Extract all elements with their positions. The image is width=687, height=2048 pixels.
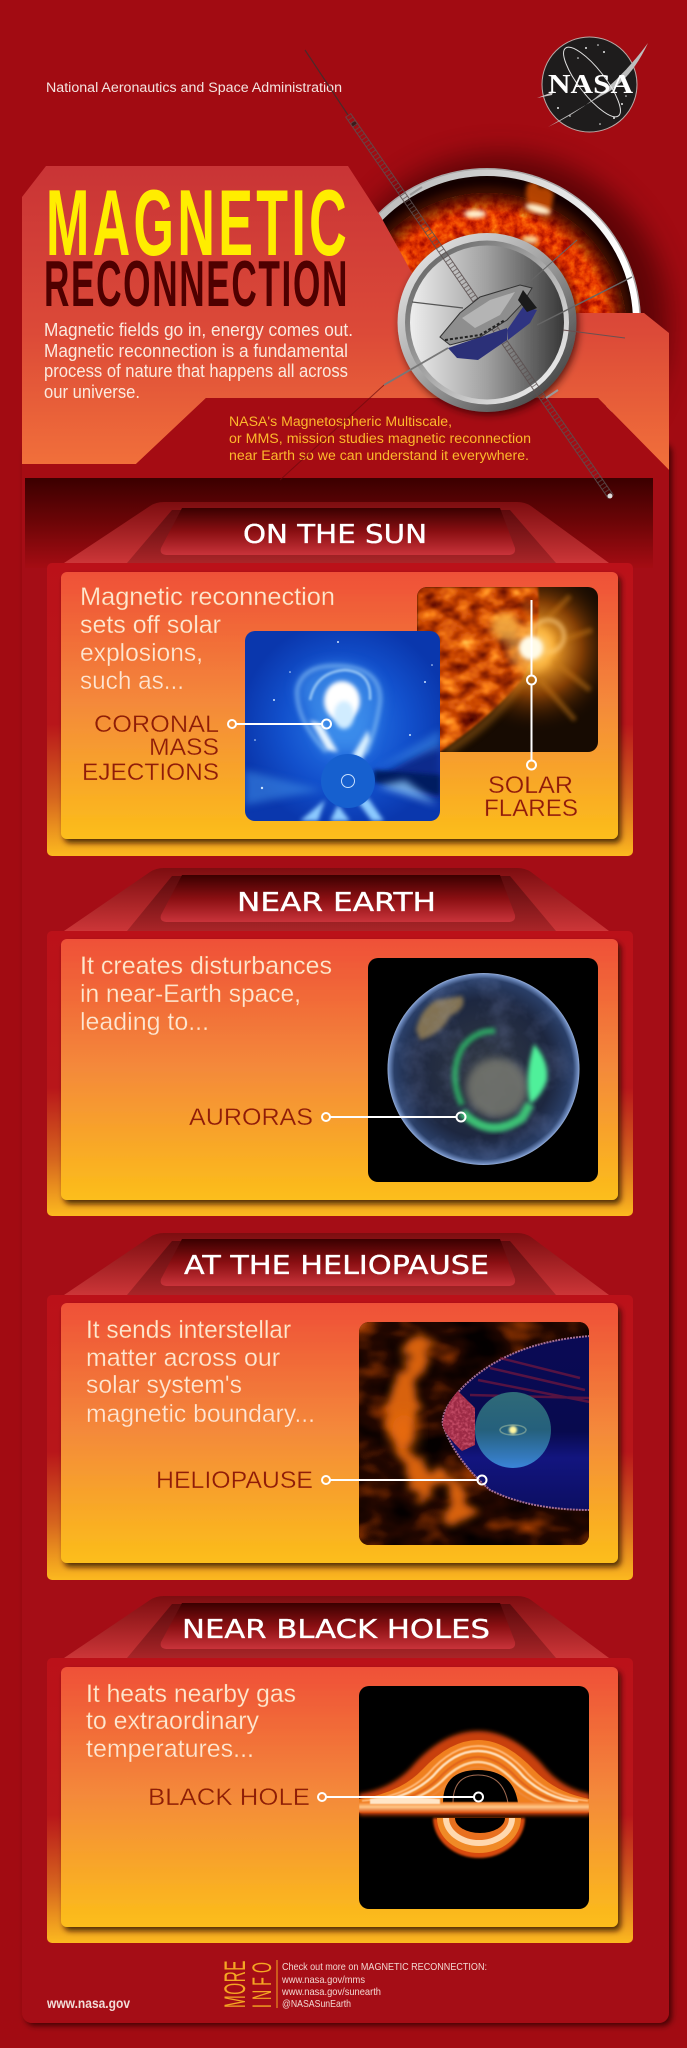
callout: auroras <box>189 1104 466 1131</box>
card: at the heliopause <box>47 1295 633 1580</box>
lattice antenna <box>305 50 614 499</box>
spacecraft disc <box>398 233 576 412</box>
image: heliopause <box>359 1322 590 1545</box>
tab: near earth: NEAR EARTH <box>237 888 436 918</box>
callout: coronal mass ejections <box>82 711 331 786</box>
image: earth with aurora <box>368 958 598 1182</box>
card: near earth <box>47 931 633 1216</box>
footer: links <box>281 1961 487 2010</box>
spacecraft booms <box>280 240 632 480</box>
illustration: sun in ring <box>378 168 641 412</box>
text: near black holes <box>86 1680 296 1763</box>
callout: heliopause <box>156 1467 486 1494</box>
callout: solar flares: SOLAR <box>488 772 573 799</box>
tab: near earth <box>64 868 609 931</box>
text: at the heliopause: matter across our <box>86 1344 280 1372</box>
callout: solar flares: FLARES <box>484 795 578 822</box>
intro text: Magnetic fields go in, energy comes out. <box>44 319 353 340</box>
main content panel <box>22 440 669 2023</box>
agency name: National Aeronautics and Space Administration <box>46 80 342 95</box>
footer: links: Check out more on MAGNETIC RECONNECTION: <box>282 1961 487 1973</box>
footer: links: www.nasa.gov/mms <box>281 1974 365 1986</box>
image: coronal mass ejection <box>245 631 440 821</box>
card: on the sun <box>47 563 633 856</box>
intro text: Magnetic reconnection is a fundamental <box>44 340 348 361</box>
footer: links: @NASASunEarth <box>282 1998 351 2010</box>
text: near earth: leading to... <box>80 1008 209 1036</box>
callout: solar flares <box>484 600 578 822</box>
text: on the sun: explosions, <box>80 639 203 667</box>
intro text: our universe. <box>44 381 140 402</box>
text: on the sun: Magnetic reconnection <box>80 583 335 611</box>
tab: near black holes: NEAR BLACK HOLES <box>182 1615 490 1645</box>
section: near earth <box>47 868 633 1216</box>
callout: auroras: AURORAS <box>189 1104 313 1131</box>
text: on the sun: sets off solar <box>80 611 221 639</box>
tab: near black holes <box>64 1596 609 1658</box>
text: at the heliopause <box>86 1316 315 1428</box>
MMS mission text <box>229 414 531 463</box>
section: at the heliopause <box>47 1233 633 1580</box>
tab: at the heliopause <box>64 1233 609 1295</box>
footer: links: www.nasa.gov/sunearth <box>281 1986 381 1998</box>
callout: black hole: BLACK HOLE <box>148 1784 310 1811</box>
footer: more info label: INFO <box>247 1958 277 2008</box>
text: near earth: It creates disturbances <box>80 952 332 980</box>
text: near black holes: to extraordinary <box>86 1707 259 1735</box>
header panel <box>22 166 669 470</box>
section: near black holes <box>47 1596 633 1943</box>
section: on the sun <box>47 502 633 856</box>
spacecraft <box>440 285 537 360</box>
text: at the heliopause: magnetic boundary... <box>86 1400 315 1428</box>
footer: more info label <box>219 1958 277 2008</box>
text: at the heliopause: solar system's <box>86 1371 242 1399</box>
image: solar flare <box>417 587 598 752</box>
MMS mission text: near Earth so we can understand it everywhere. <box>229 448 529 463</box>
header notch <box>22 398 669 480</box>
intro text: process of nature that happens all across <box>44 360 348 381</box>
dark backdrop at top of sections <box>25 478 653 568</box>
footer: more info divider <box>276 1960 278 2008</box>
text: near earth: in near-Earth space, <box>80 980 301 1008</box>
title: MAGNETIC: MAGNETIC <box>46 170 350 275</box>
icon: NASA logo: NASA <box>548 69 634 99</box>
intro text <box>44 319 353 402</box>
MMS mission text: NASA's Magnetospheric Multiscale, <box>229 414 452 429</box>
text: near earth <box>80 952 332 1036</box>
callout: coronal mass ejections: MASS <box>149 734 219 761</box>
footer: more info label: MORE <box>219 1960 252 2008</box>
callout: black hole <box>148 1784 483 1811</box>
text: at the heliopause: It sends interstellar <box>86 1316 291 1344</box>
MMS mission text: or MMS, mission studies magnetic reconnection <box>229 431 531 446</box>
title: RECONNECTION: RECONNECTION <box>44 247 349 320</box>
callout: heliopause: HELIOPAUSE <box>156 1467 313 1494</box>
text: near black holes: It heats nearby gas <box>86 1680 296 1708</box>
tab: at the heliopause: AT THE HELIOPAUSE <box>184 1251 489 1281</box>
text: near black holes: temperatures... <box>86 1735 254 1763</box>
ring shadow <box>332 154 668 490</box>
image: black hole <box>359 1686 590 1909</box>
text: on the sun <box>80 583 335 695</box>
text: on the sun: such as... <box>80 667 184 695</box>
tab: on the sun <box>64 502 609 563</box>
icon: NASA logo <box>537 37 648 132</box>
callout: coronal mass ejections: CORONAL <box>94 711 219 738</box>
callout: coronal mass ejections: EJECTIONS <box>82 759 219 786</box>
footer: website: www.nasa.gov <box>46 1995 130 2011</box>
tab: on the sun: ON THE SUN <box>243 520 427 550</box>
card: near black holes <box>47 1658 633 1943</box>
